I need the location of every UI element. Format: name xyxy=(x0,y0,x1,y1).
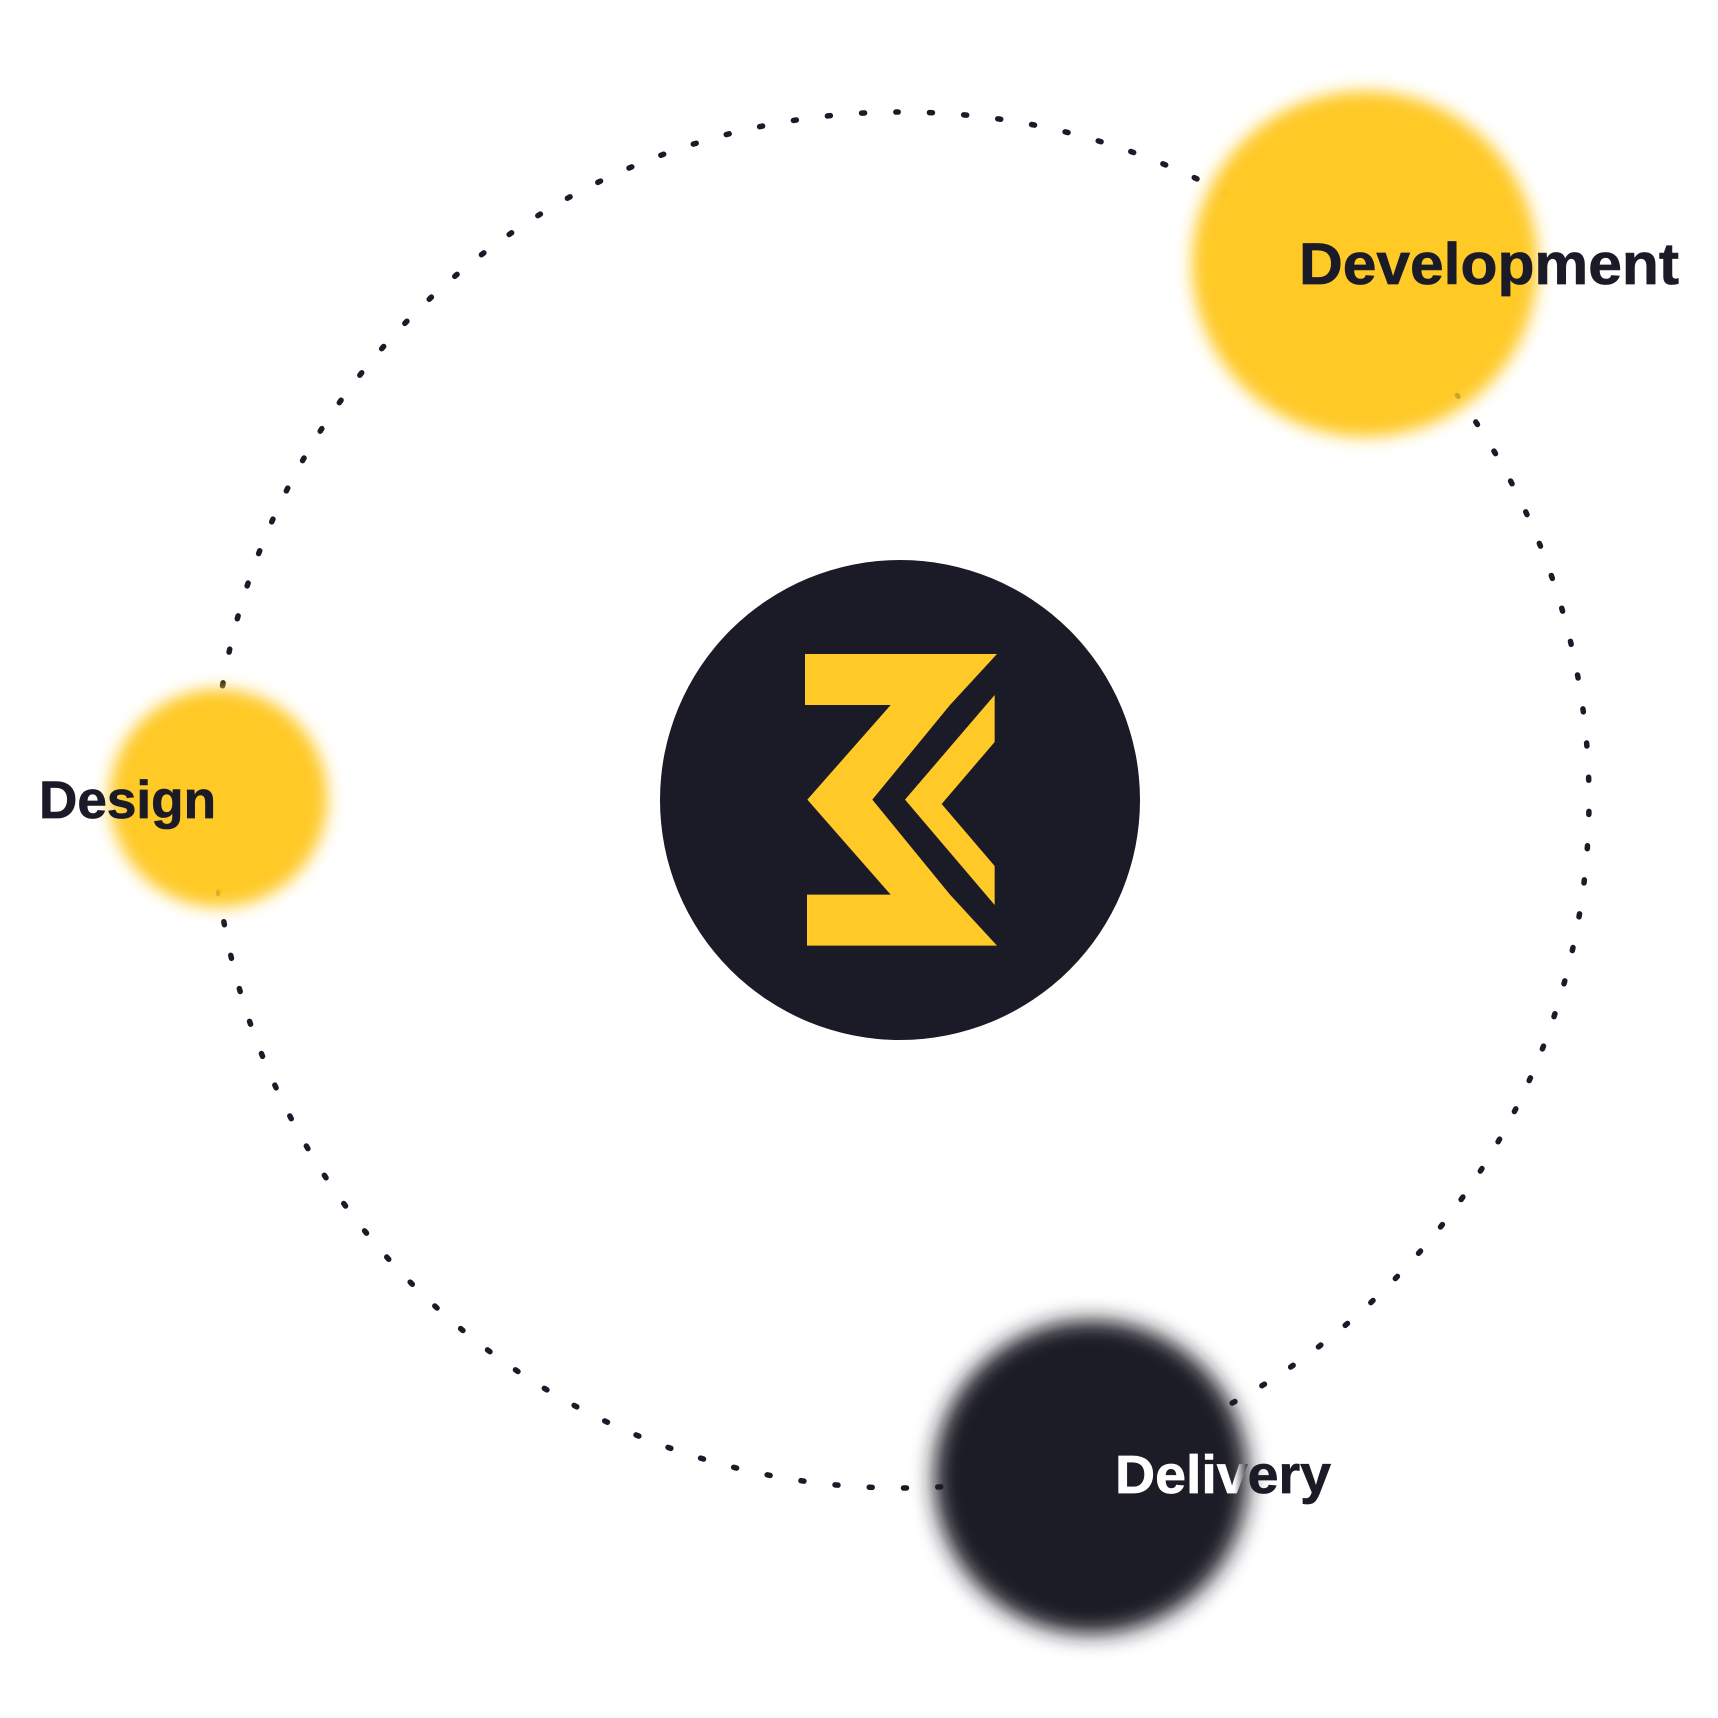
development circle xyxy=(1192,91,1538,437)
design circle xyxy=(110,689,328,907)
design label: Design xyxy=(39,771,216,830)
center circle xyxy=(660,560,1140,1040)
node: development xyxy=(1192,91,1679,437)
node: delivery xyxy=(934,1320,1331,1634)
delivery circle xyxy=(934,1320,1248,1634)
development label: Development xyxy=(1299,232,1679,297)
logo mark xyxy=(805,654,997,946)
node: design xyxy=(39,689,328,907)
center badge with logo xyxy=(660,560,1140,1040)
dotted orbit ring xyxy=(209,108,1593,1492)
delivery label: Delivery xyxy=(1115,1445,1331,1505)
faint ring dot on design circle xyxy=(216,890,220,896)
faint ring dot on development circle xyxy=(1454,392,1462,400)
